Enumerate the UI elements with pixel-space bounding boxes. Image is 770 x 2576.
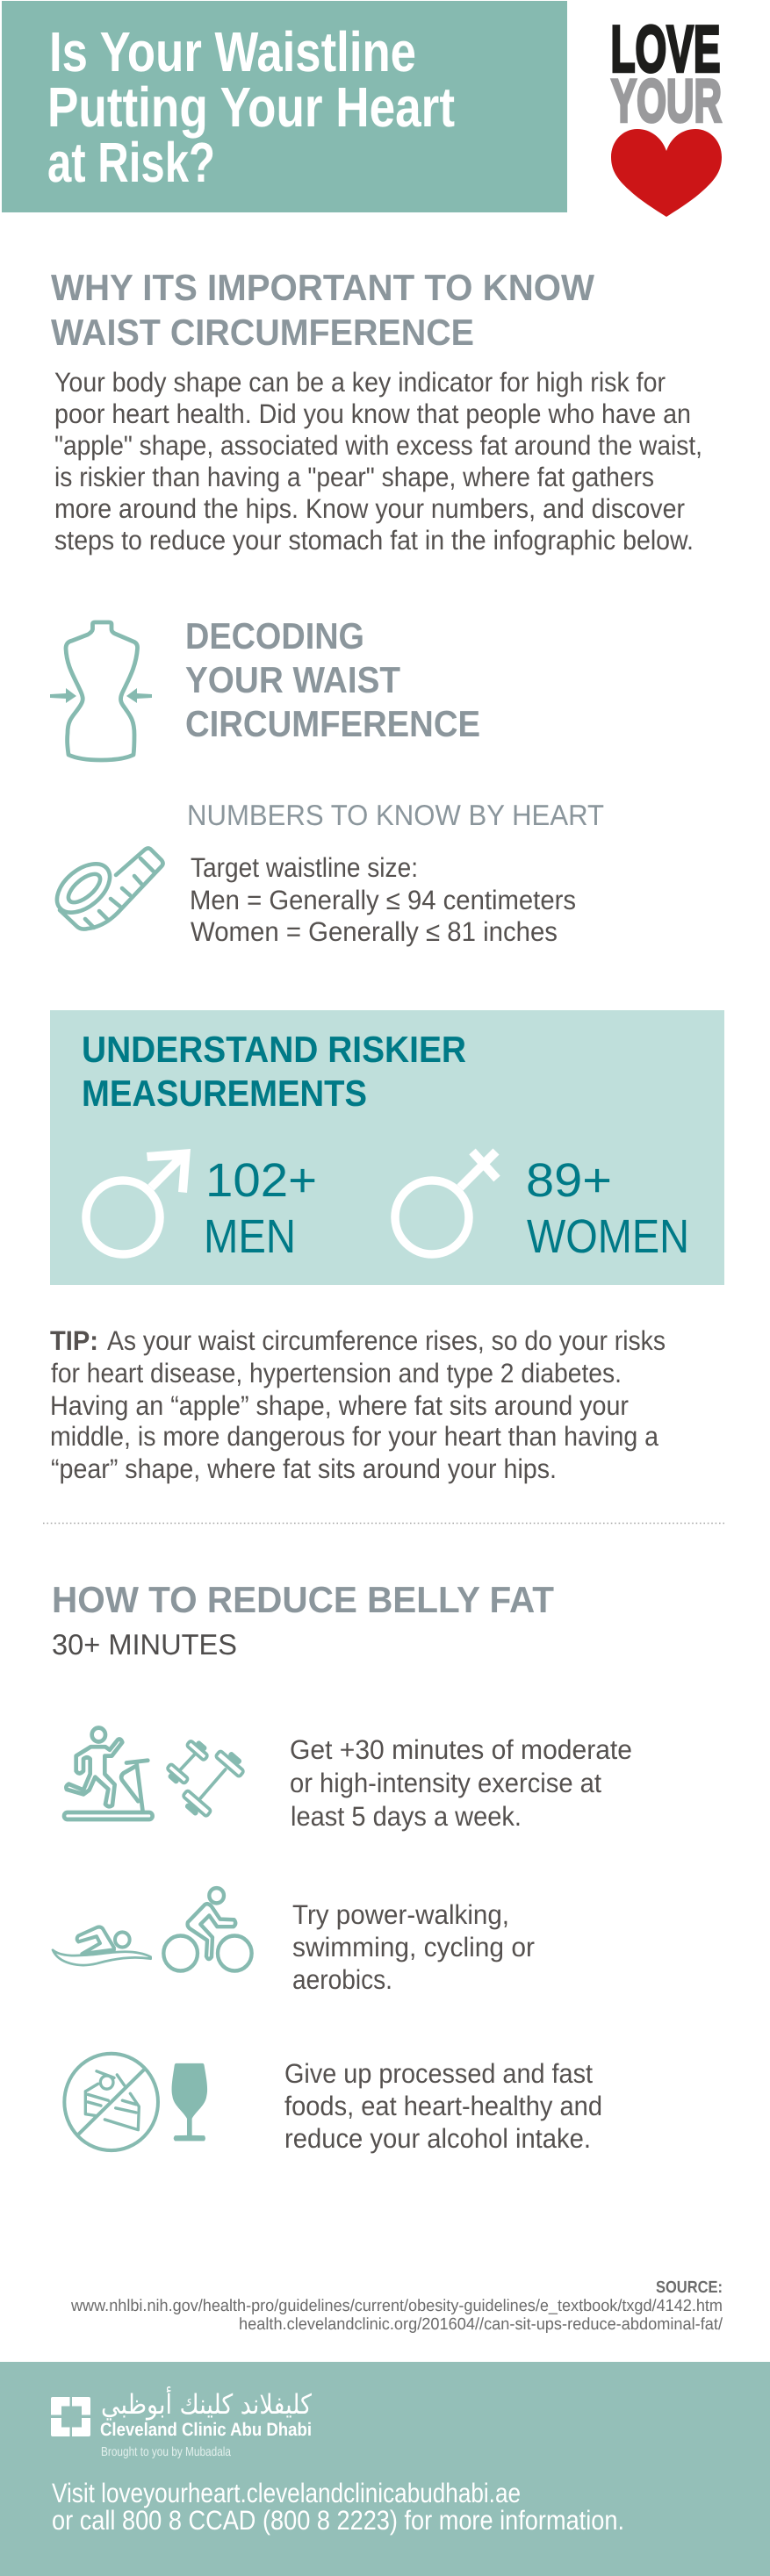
stat: men 102+ bbox=[204, 1154, 317, 1263]
text block: exercise: or high-intensity exercise at bbox=[290, 1768, 601, 1798]
text block: food: Give up processed and fast bbox=[284, 2058, 593, 2089]
logo: cleveland clinic abu dhabi: Brought to you by Mubadala bbox=[101, 2445, 232, 2459]
text block: intro paragraph: "apple" shape, associated with excess fat around the waist, bbox=[54, 430, 702, 461]
title: at Risk? bbox=[47, 131, 215, 194]
stat: women 89+ bbox=[526, 1154, 689, 1263]
text block: tip bbox=[50, 1325, 666, 1484]
text block: tip: for heart disease, hypertension and type 2 diabetes. bbox=[51, 1358, 622, 1388]
text block: sources: health.clevelandclinic.org/201604//can-sit-ups-reduce-abdominal-fat/ bbox=[239, 2315, 723, 2334]
subheading: 30+ minutes: 30+ MINUTES bbox=[52, 1628, 237, 1661]
logo: cleveland clinic abu dhabi: Cleveland Clinic Abu Dhabi bbox=[100, 2420, 312, 2440]
panel: title banner bbox=[2, 1, 567, 212]
text block: tip: As your waist circumference rises, so do your risks bbox=[107, 1325, 666, 1356]
icon: treadmill runner and dumbbells bbox=[64, 1728, 244, 1819]
icon: mannequin with waist arrows bbox=[50, 622, 152, 760]
text block: sources: www.nhlbi.nih.gov/health-pro/guidelines/current/obesity-guidelines/e_textbook/txgd/4142.htm bbox=[70, 2297, 723, 2315]
title bbox=[47, 20, 455, 194]
text block: target waistline bbox=[190, 852, 576, 947]
subheading: numbers to know by heart: NUMBERS TO KNOW BY HEART bbox=[187, 799, 604, 831]
icon: male symbol bbox=[86, 1149, 191, 1254]
text block: intro paragraph: poor heart health. Did you know that people who have an bbox=[54, 398, 691, 429]
stat: women 89+: WOMEN bbox=[527, 1210, 689, 1263]
text block: intro paragraph: Your body shape can be a key indicator for high risk for bbox=[54, 367, 666, 398]
text block: exercise bbox=[290, 1734, 632, 1832]
text block: contact: Visit loveyourheart.clevelandclinicabudhabi.ae bbox=[52, 2478, 521, 2508]
heading: why its important bbox=[51, 267, 594, 353]
heading: riskier measurements bbox=[82, 1029, 466, 1114]
text block: contact bbox=[52, 2478, 624, 2536]
text block: sources: SOURCE: bbox=[656, 2278, 723, 2297]
text block: activities: aerobics. bbox=[292, 1964, 392, 1995]
text block: tip: Having an “apple” shape, where fat sits around your bbox=[50, 1390, 629, 1421]
panel: footer bbox=[0, 2362, 770, 2576]
icon: swimmer and cyclist bbox=[53, 1888, 252, 1970]
stat: women 89+: 89+ bbox=[526, 1154, 612, 1207]
stat: men 102+: MEN bbox=[204, 1210, 296, 1263]
text block: contact: or call 800 8 CCAD (800 8 2223) for more information. bbox=[52, 2505, 624, 2536]
heading: why its important: WHY ITS IMPORTANT TO KNOW bbox=[51, 267, 594, 308]
text block: intro paragraph: more around the hips. Know your numbers, and discover bbox=[54, 493, 685, 524]
text block: food: reduce your alcohol intake. bbox=[284, 2123, 591, 2154]
text block: target waistline: Women = Generally ≤ 81 inches bbox=[191, 916, 558, 947]
text block: intro paragraph: is riskier than having a "pear" shape, where fat gathers bbox=[54, 462, 654, 492]
heading: why its important: WAIST CIRCUMFERENCE bbox=[51, 312, 474, 353]
logo: cleveland clinic abu dhabi bbox=[51, 2386, 312, 2459]
text block: food: foods, eat heart-healthy and bbox=[284, 2091, 602, 2121]
logo: love your heart bbox=[611, 11, 722, 217]
icon: measuring tape bbox=[48, 848, 162, 929]
text block: food bbox=[284, 2058, 602, 2154]
heading: riskier measurements: MEASUREMENTS bbox=[82, 1073, 367, 1114]
text block: sources bbox=[70, 2278, 723, 2334]
icon: no fast food and wine glass bbox=[64, 2054, 207, 2150]
text block: exercise: Get +30 minutes of moderate bbox=[290, 1734, 632, 1765]
text block: target waistline: Target waistline size: bbox=[191, 852, 418, 883]
heading: decoding your waist circumference bbox=[185, 615, 480, 744]
icon: clinic cross mark bbox=[51, 2397, 90, 2436]
text block: tip: middle, is more dangerous for your heart than having a bbox=[50, 1421, 659, 1452]
heading: decoding your waist circumference: YOUR WAIST bbox=[185, 659, 400, 700]
text block: tip: TIP: bbox=[50, 1325, 98, 1356]
heading: riskier measurements: UNDERSTAND RISKIER bbox=[82, 1029, 466, 1070]
title: Putting Your Heart bbox=[47, 75, 455, 139]
heading: decoding your waist circumference: DECODING bbox=[185, 615, 364, 657]
text block: target waistline: Men = Generally ≤ 94 centimeters bbox=[190, 885, 576, 915]
text block: activities: Try power-walking, bbox=[292, 1899, 509, 1930]
text block: exercise: least 5 days a week. bbox=[291, 1801, 522, 1832]
text block: activities bbox=[292, 1899, 535, 1995]
title: Is Your Waistline bbox=[49, 20, 416, 83]
heading: how to reduce belly fat: HOW TO REDUCE BELLY FAT bbox=[52, 1579, 554, 1620]
text block: intro paragraph: steps to reduce your stomach fat in the infographic below. bbox=[54, 525, 694, 556]
logo: cleveland clinic abu dhabi: كليفلاند كلينك أبوظبي bbox=[101, 2386, 312, 2421]
text block: activities: swimming, cycling or bbox=[292, 1932, 535, 1962]
text block: tip: “pear” shape, where fat sits around your hips. bbox=[51, 1453, 557, 1484]
panel: understand riskier measurements bbox=[50, 1010, 724, 1285]
heading: decoding your waist circumference: CIRCUMFERENCE bbox=[185, 703, 480, 744]
icon: female symbol bbox=[395, 1152, 497, 1254]
text block: intro paragraph bbox=[54, 367, 702, 556]
stat: men 102+: 102+ bbox=[205, 1154, 317, 1207]
